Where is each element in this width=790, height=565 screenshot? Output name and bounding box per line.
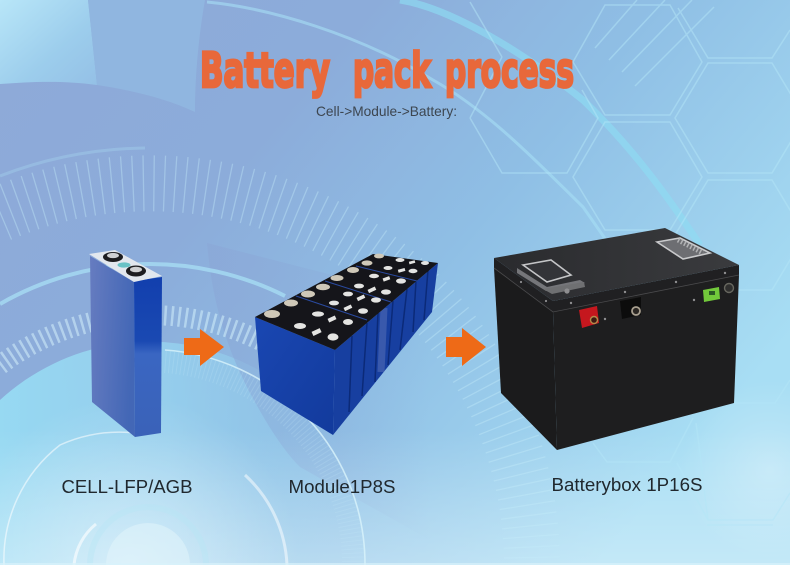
box lid	[494, 228, 739, 301]
cell top	[89, 250, 162, 282]
left handle	[517, 260, 585, 294]
module side face	[333, 263, 438, 435]
arrow: module to battery box	[446, 328, 486, 366]
black terminal	[620, 297, 641, 319]
cell side face	[134, 277, 162, 437]
box front face	[553, 275, 739, 450]
title: Battery	[200, 43, 330, 99]
red terminal	[579, 306, 599, 328]
module terminals	[264, 254, 384, 318]
title: pack	[353, 43, 432, 99]
subtitle: Cell->Module->Battery:	[316, 103, 457, 119]
module top	[255, 254, 438, 350]
arrow: cell to module	[184, 329, 224, 366]
cell front face	[90, 256, 135, 437]
green connector	[703, 287, 720, 302]
module	[255, 254, 438, 435]
bolts	[520, 272, 726, 320]
cell battery	[89, 250, 162, 437]
label: battery box: Batterybox 1P16S	[552, 475, 702, 495]
title	[200, 43, 574, 99]
module front face	[255, 317, 335, 435]
right handle	[657, 238, 710, 259]
box left face	[494, 268, 557, 450]
label: cell: CELL-LFP/AGB	[62, 477, 192, 497]
round port	[724, 284, 734, 292]
label: module: Module1P8S	[288, 477, 396, 497]
battery box	[494, 228, 739, 450]
title: process	[445, 43, 574, 99]
